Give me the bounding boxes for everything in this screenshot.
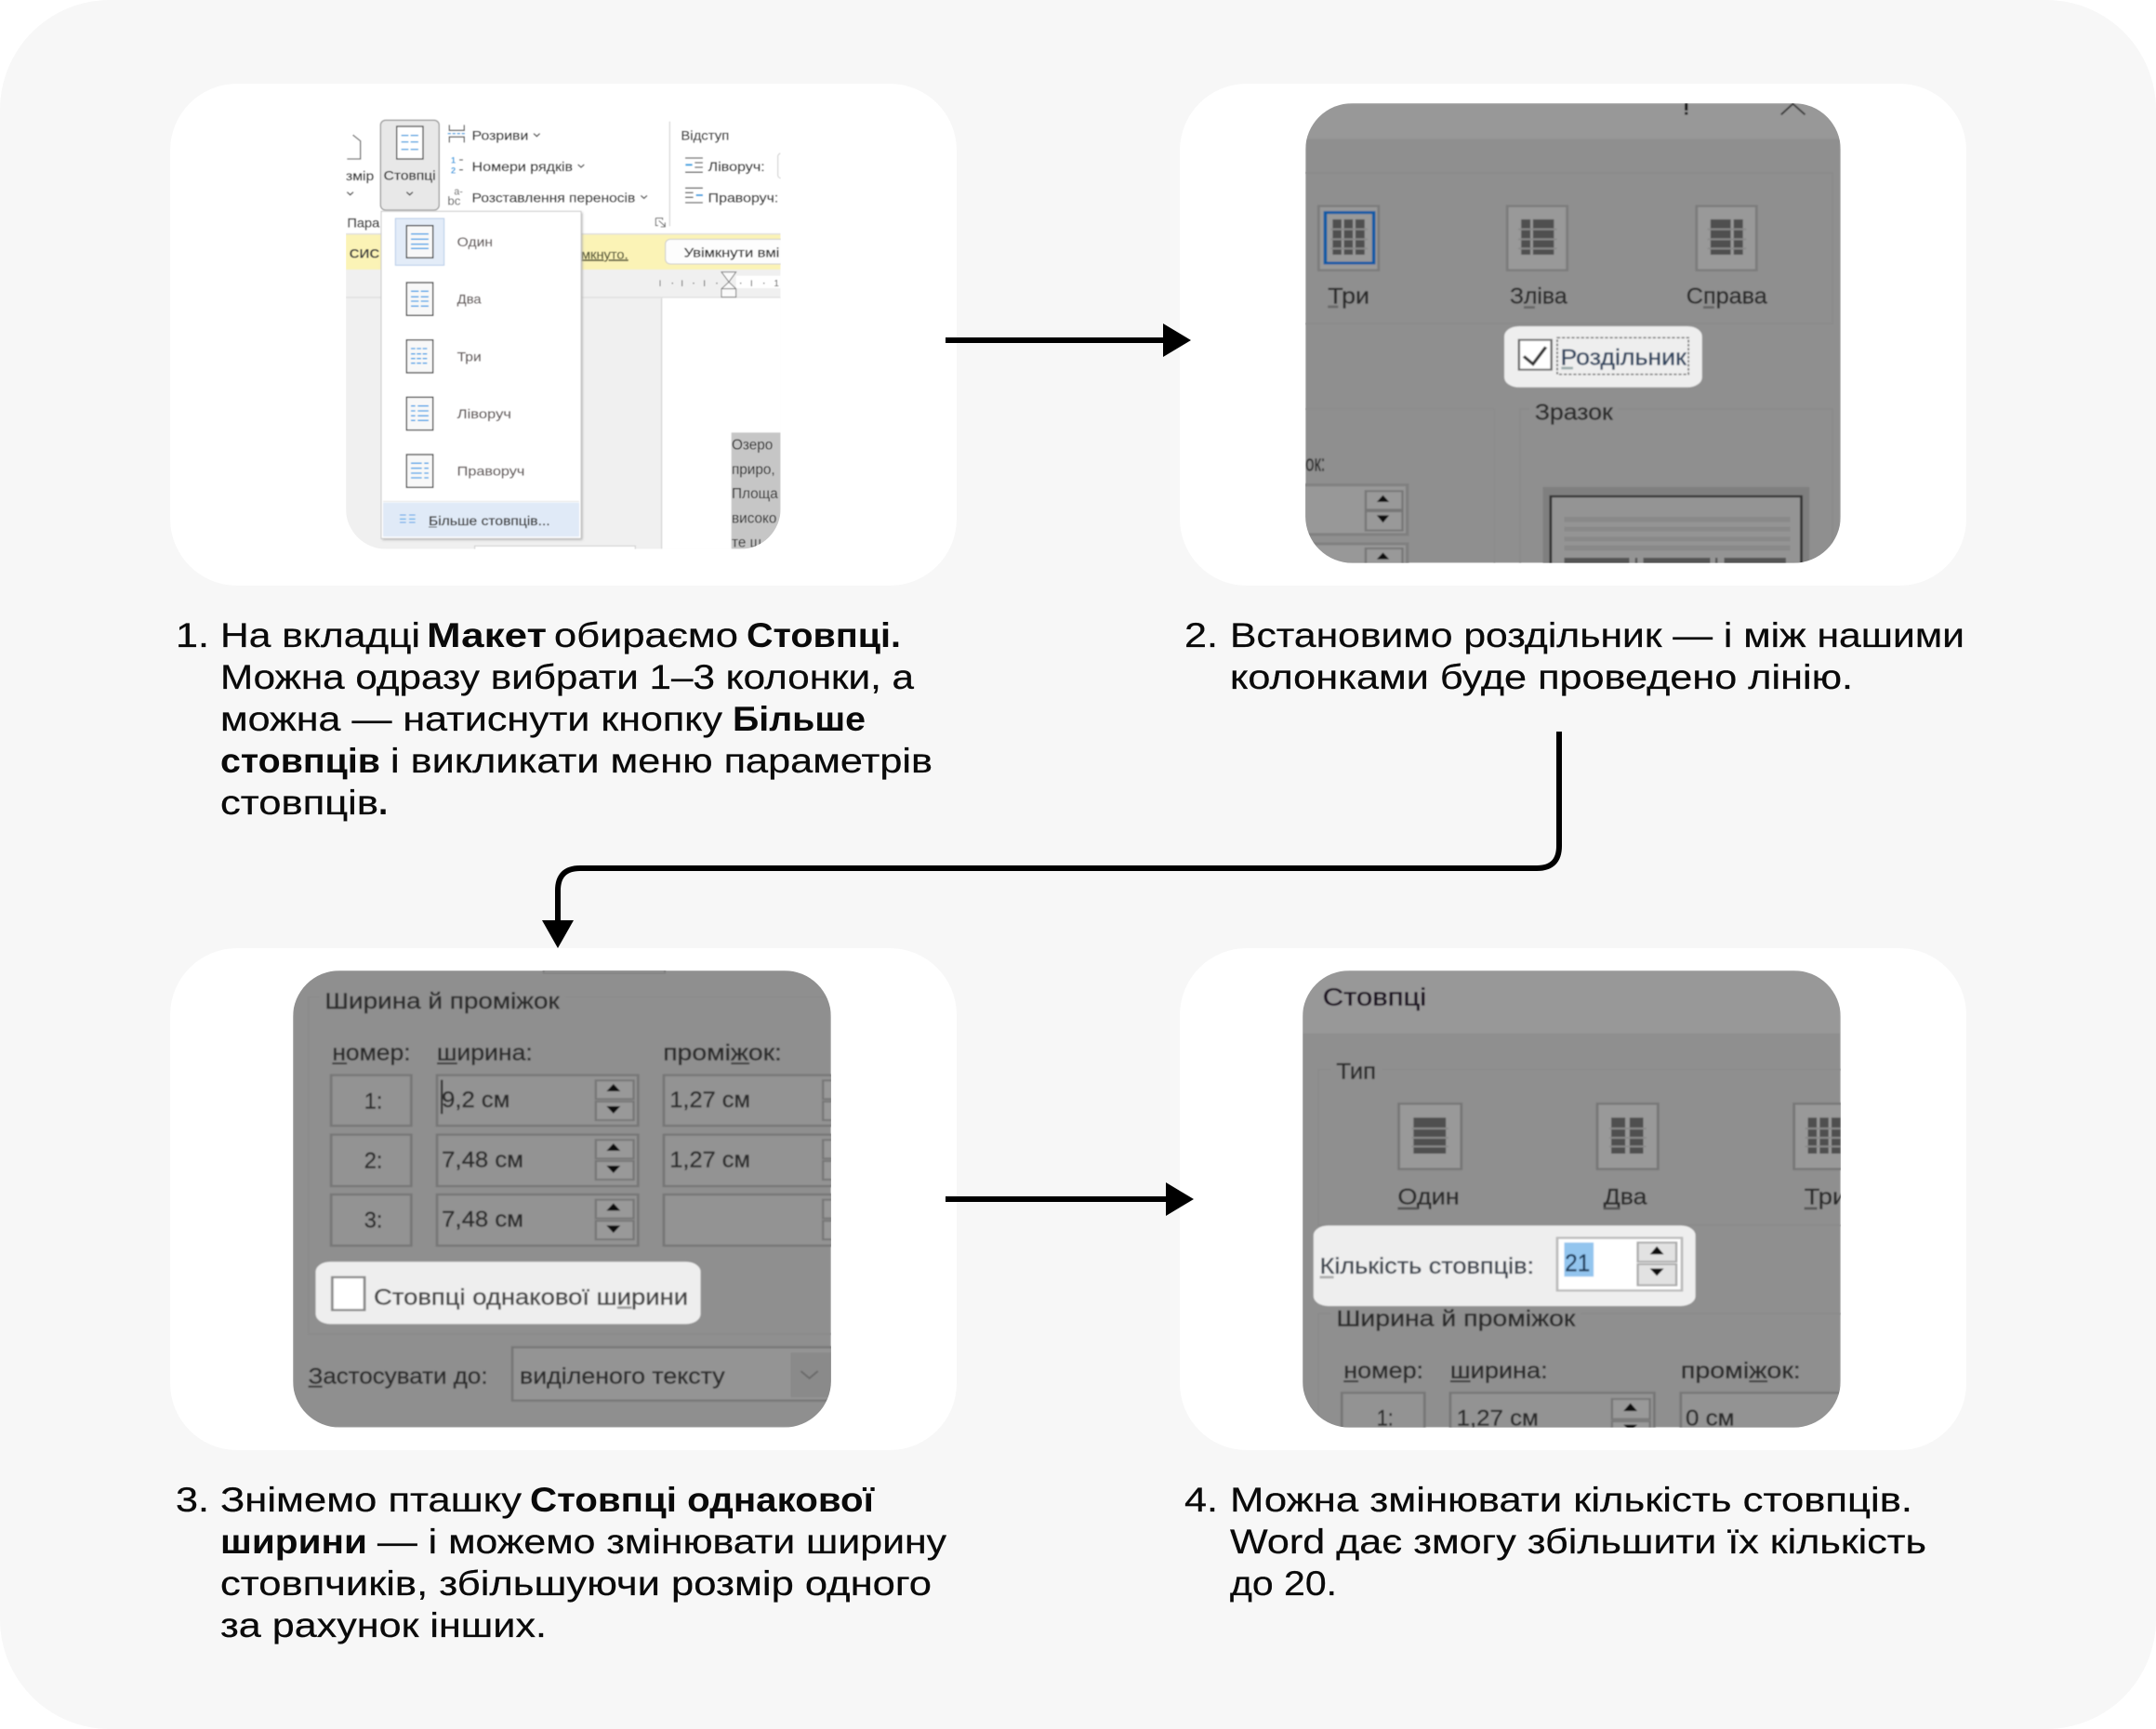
screenshot: equal width option: виділеного тексту [520,1363,725,1389]
screenshot: Word columns menu: Номери рядків [472,159,573,174]
text block: step 1: 1. [176,616,209,654]
screenshot: equal width option: ширина: [437,1040,533,1065]
text block: step 1: стовпців [220,784,378,822]
screenshot: separator option: Роздільник [1561,345,1686,370]
screenshot: Word columns menu: високо [732,511,776,527]
text block: step 1: можна — натиснути кнопку [220,700,723,738]
screenshot: Word columns menu: Один [457,234,493,249]
arrow: step 1 to step 2 [946,323,1191,357]
panel: step 4 card [1303,970,1841,1428]
screenshot: number of columns: номер: [1343,1358,1423,1383]
screenshot: number of columns: 1: [1377,1405,1394,1431]
screenshot: equal width option: 9,2 см [442,1087,509,1112]
screenshot: separator option [1290,103,1841,583]
screenshot: Word columns menu: Праворуч [457,464,524,479]
screenshot: Word columns menu: a- [454,186,463,197]
screenshot: Word columns menu: Розриви [472,128,528,143]
screenshot: Word columns menu: Ліворуч: [708,159,765,174]
text block: step 3: Знімемо пташку [220,1481,522,1519]
screenshot: Word columns menu: Розставлення переносів [472,190,635,205]
screenshot: separator option: Три [1328,284,1369,309]
screenshot: equal width option: 3: [364,1208,383,1233]
screenshot: equal width option: 1: [364,1088,383,1114]
screenshot: equal width option [293,967,861,1428]
screenshot: equal width option: номер: [332,1040,411,1065]
screenshot: number of columns: Три [1805,1184,1846,1209]
screenshot: equal width option: Застосувати до: [309,1363,488,1389]
screenshot: number of columns: Кількість стовпців: [1320,1253,1534,1278]
screenshot: number of columns: Ширина й проміжок [1336,1306,1576,1331]
screenshot: Word columns menu [346,117,796,555]
screenshot: separator option: Справа [1686,284,1767,309]
text block: step 3: ширини [220,1523,367,1561]
screenshot: Word columns menu: Праворуч: [708,190,778,205]
text block: step 4 [1184,1481,1926,1603]
screenshot: Word columns menu: Більше стовпців... [429,513,550,528]
text block: step 1: . [378,784,388,822]
screenshot: Word columns menu: приро, [732,462,775,478]
text block: step 4: до 20. [1230,1564,1337,1603]
screenshot: Word columns menu: Відступ [681,128,729,143]
text block: step 4: Можна змінювати кількість стовпців. [1230,1481,1912,1519]
screenshot: number of columns: Один [1397,1184,1460,1209]
screenshot: Word columns menu: 1 [451,156,456,165]
text block: step 2: колонками буде проведено лінію. [1230,658,1853,696]
screenshot: number of columns: ширина: [1450,1358,1548,1383]
panel: step 3 card [293,970,831,1428]
text block: step 1: і викликати меню параметрів [390,742,933,780]
text block: step 1: Можна одразу вибрати 1–3 колонки, а [220,658,914,696]
screenshot: equal width option: 1,27 см [669,1147,750,1172]
screenshot: Word columns menu: Пара [347,215,380,230]
screenshot: Word columns menu: Увімкнути вмі [684,245,779,260]
screenshot: separator option: Зліва [1510,284,1567,309]
screenshot: number of columns: проміжок: [1681,1358,1801,1383]
text block: step 1 [176,616,933,822]
screenshot: equal width option: 1,27 см [669,1087,750,1112]
text block: step 3: стовпчиків, збільшуючи розмір одного [220,1564,932,1603]
text block: step 4: 4. [1184,1481,1218,1519]
screenshot: equal width option: 7,48 см [442,1147,523,1172]
text block: step 2: Встановимо роздільник — і між нашими [1230,616,1964,654]
screenshot: Word columns menu: bc [447,193,461,207]
screenshot: Word columns menu: 1 [774,279,779,289]
text block: step 3: за рахунок інших. [220,1606,547,1644]
screenshot: Word columns menu: Три [457,349,482,363]
arrow: step 2 to step 3 [542,732,1559,948]
text block: step 1: обираємо [554,616,738,654]
screenshot: separator option: ок: [1305,451,1325,476]
text block: step 3: Стовпці однакової [530,1481,876,1519]
screenshot: Word columns menu: Стовпці [384,167,436,182]
text block: step 3: 3. [176,1481,209,1519]
text block: step 1: На вкладці [220,616,420,654]
text block: step 2: 2. [1184,616,1218,654]
screenshot: Word columns menu: змір [346,168,375,183]
screenshot: Word columns menu: 2 [451,166,456,176]
text block: step 1: Стовпці. [747,616,901,654]
screenshot: number of columns: 21 [1565,1250,1590,1277]
screenshot: Word columns menu: те ш [732,535,761,550]
screenshot: number of columns: 0 см [1686,1405,1735,1431]
text block: step 4: Word дає змогу збільшити їх кількість [1230,1523,1926,1561]
text block: step 3: — і можемо змінювати ширину [377,1523,947,1561]
screenshot: Word columns menu: Ліворуч [457,406,511,421]
screenshot: Word columns menu: Два [457,292,482,307]
screenshot: number of columns: 1,27 см [1457,1405,1539,1431]
screenshot: equal width option: 2: [364,1148,383,1173]
screenshot: Word columns menu: Озеро [732,437,773,453]
screenshot: number of columns [1303,970,1841,1428]
screenshot: equal width option: Стовпці однакової ширини [374,1284,688,1310]
screenshot: Word columns menu: мкнуто. [581,246,628,261]
screenshot: equal width option: проміжок: [663,1040,782,1065]
panel: step 2 card [1305,103,1841,563]
arrow: step 3 to step 4 [946,1182,1194,1216]
text block: step 1: стовпців [220,742,380,780]
screenshot: Word columns menu: Площа [732,486,778,502]
screenshot: number of columns: Два [1604,1184,1647,1209]
screenshot: number of columns: Тип [1336,1059,1376,1084]
text block: step 2 [1184,616,1964,696]
screenshot: separator option: Зразок [1535,400,1613,425]
screenshot: equal width option: 7,48 см [442,1206,523,1232]
text block: step 1: Більше [733,700,866,738]
screenshot: Word columns menu: СИС [350,246,379,261]
screenshot: equal width option: Ширина й проміжок [324,988,560,1013]
text block: step 3 [176,1481,947,1644]
text block: step 1: Макет [427,616,547,654]
screenshot: number of columns: Стовпці [1323,984,1426,1011]
panel: step 1 card [346,119,781,548]
